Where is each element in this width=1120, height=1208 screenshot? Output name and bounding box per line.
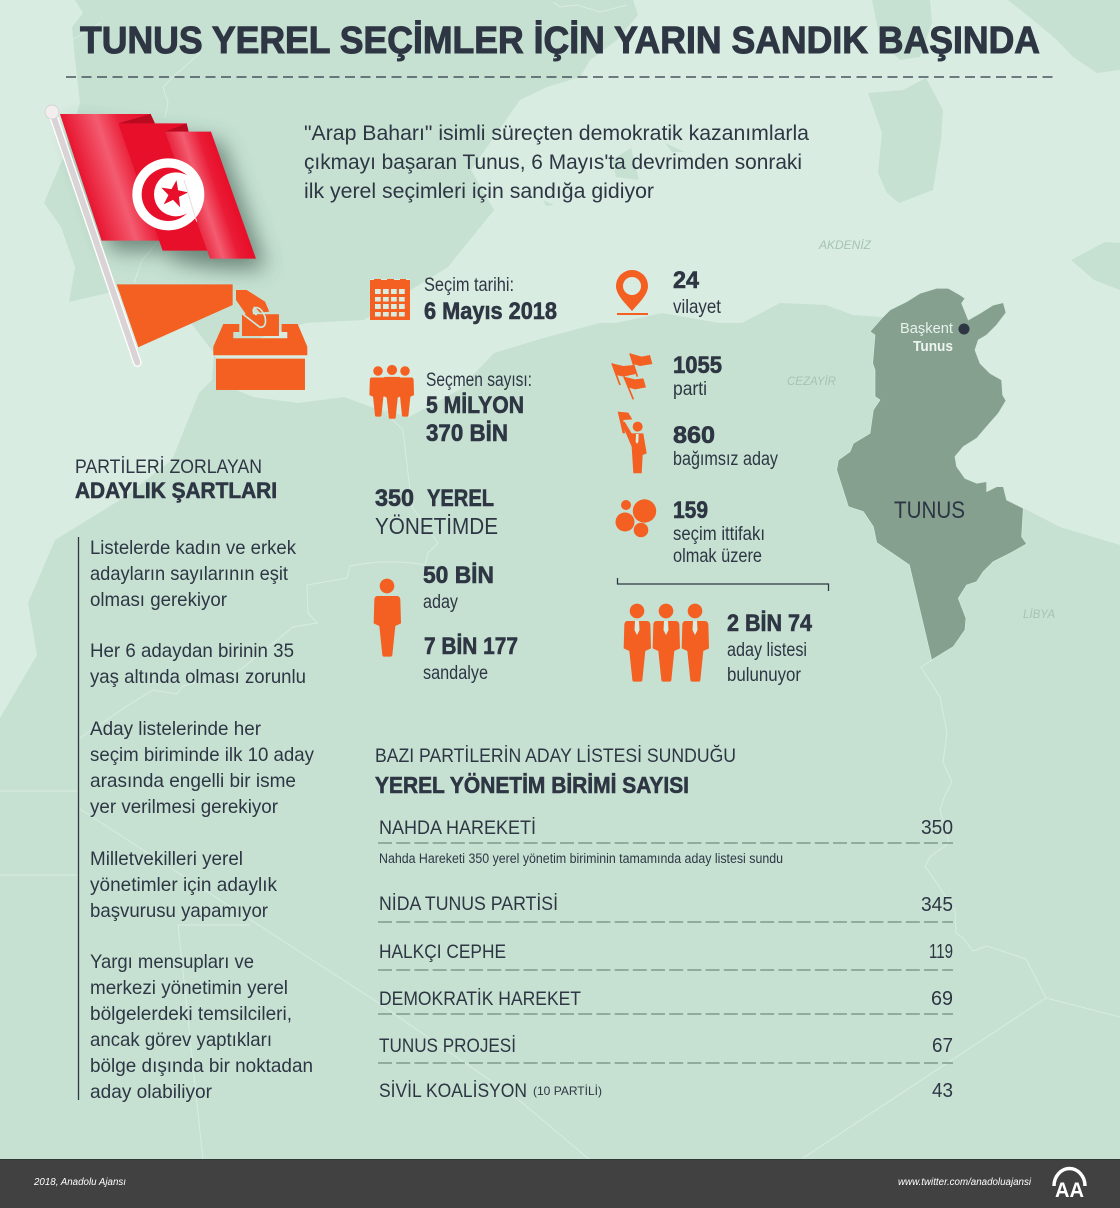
list: candidacy conditions: merkezi yönetimin yerel [90, 977, 288, 999]
list: candidacy conditions: Aday listelerinde her [90, 718, 261, 740]
list: candidacy conditions: Listelerde kadın ve erkek [90, 537, 296, 559]
icon: calendar [370, 279, 410, 320]
stat: independents [673, 422, 778, 470]
stat: candidates and seats: sandalye [423, 663, 488, 684]
stat: election date [424, 275, 557, 325]
table: parties and local unit counts [378, 816, 953, 1102]
stat: provinces: vilayet [673, 297, 722, 318]
list: candidacy conditions: adayların sayılarının eşit [90, 563, 289, 585]
stat: election date: 6 Mayıs 2018 [424, 298, 557, 325]
heading: candidacy conditions [75, 457, 277, 503]
stat: 350 local administrations: 350 [375, 485, 414, 512]
intro text: ilk yerel seçimleri için sandığa gidiyor [304, 180, 654, 203]
list: candidacy conditions: arasında engelli bir isme [90, 770, 296, 792]
stat: voters: Seçmen sayısı: [426, 370, 532, 391]
map: Tunisia: Tunus [913, 339, 953, 355]
icon: Anadolu Agency logo [1054, 1168, 1085, 1202]
icon: alliance circles [616, 499, 656, 537]
table: parties and local unit counts: 67 [932, 1035, 953, 1057]
stat: candidate lists: bulunuyor [727, 665, 802, 686]
stat: provinces [673, 267, 722, 318]
stat: independents: 860 [673, 422, 715, 449]
list: candidacy conditions: Her 6 adaydan birinin 35 [90, 640, 294, 662]
icon: candidate [374, 579, 401, 657]
stat: voters [426, 370, 532, 447]
map labels: CEZAYİR [787, 374, 836, 388]
intro text: "Arap Baharı" isimli süreçten demokratik kazanımlarla [304, 122, 809, 145]
intro text: çıkmayı başaran Tunus, 6 Mayıs'ta devrimden sonraki [304, 151, 802, 174]
heading: party table [375, 745, 736, 798]
table: parties and local unit counts: 350 [921, 817, 953, 839]
stat: alliances: olmak üzere [673, 546, 762, 567]
heading: party table: YEREL YÖNETİM BİRİMİ SAYISI [375, 772, 689, 798]
stat: election date: Seçim tarihi: [424, 275, 514, 296]
stat: candidate lists [727, 610, 813, 686]
table: parties and local unit counts: NAHDA HAREKETİ [379, 816, 536, 839]
stat: parties: 1055 [673, 352, 722, 379]
icon: voters [369, 365, 414, 419]
list: candidacy conditions: yaş altında olması zorunlu [90, 666, 306, 688]
heading: candidacy conditions: ADAYLIK ŞARTLARI [75, 478, 277, 503]
illustration: Tunisian flag and ballot box [45, 105, 307, 390]
stat: candidates and seats: 50 BİN [423, 562, 494, 589]
title: TUNUS YEREL SEÇİMLER İÇİN YARIN SANDIK BAŞINDA [80, 20, 1040, 62]
stat: 350 local administrations [375, 485, 498, 539]
table: parties and local unit counts: (10 PARTİLİ) [533, 1084, 602, 1098]
icon: three candidates [624, 604, 709, 682]
icon: independent candidate [618, 412, 647, 473]
footer bar: www.twitter.com/anadoluajansi [898, 1177, 1032, 1188]
table: parties and local unit counts: TUNUS PROJESİ [379, 1034, 516, 1057]
map: Tunisia: TUNUS [894, 497, 965, 524]
list: candidacy conditions: yer verilmesi gerekiyor [90, 796, 278, 818]
stat: candidates and seats: aday [423, 592, 458, 613]
list: candidacy conditions: olması gerekiyor [90, 589, 227, 611]
stat: candidates and seats: 7 BİN 177 [424, 633, 518, 660]
heading: party table: BAZI PARTİLERİN ADAY LİSTESİ SUNDUĞU [375, 745, 736, 767]
stat: alliances: 159 [673, 497, 708, 524]
table: parties and local unit counts: NİDA TUNUS PARTİSİ [379, 892, 558, 915]
table: parties and local unit counts: HALKÇI CEPHE [379, 941, 506, 963]
stat: voters: 5 MİLYON [426, 392, 524, 419]
stat: parties [673, 352, 722, 400]
icon: location pin [616, 270, 648, 315]
list: candidacy conditions: başvurusu yapamıyor [90, 900, 268, 922]
table: parties and local unit counts: 119 [929, 941, 953, 963]
stat: 350 local administrations: YÖNETİMDE [375, 513, 498, 539]
footer bar: 2018, Anadolu Ajansı [33, 1177, 126, 1188]
map labels [787, 238, 1055, 621]
list: candidacy conditions: bölge dışında bir noktadan [90, 1055, 313, 1077]
list: candidacy conditions: ancak görev yaptıkları [90, 1029, 272, 1051]
table: parties and local unit counts: SİVİL KOALİSYON [379, 1079, 527, 1102]
intro text [304, 122, 809, 203]
icon: Anadolu Agency logo: AA [1055, 1179, 1084, 1202]
icon: party flags [612, 353, 652, 399]
stat: candidates and seats [423, 562, 518, 684]
stat: candidate lists: 2 BİN 74 [727, 610, 813, 637]
map: Tunisia: Başkent [900, 321, 953, 337]
list: candidacy conditions: bölgelerdeki temsilcileri, [90, 1003, 292, 1025]
list: candidacy conditions: Yargı mensupları ve [90, 951, 254, 973]
footer bar [0, 1159, 1120, 1208]
stat: candidate lists: aday listesi [727, 640, 807, 661]
table: parties and local unit counts: Nahda Hareketi 350 yerel yönetim biriminin tamamında aday listesi sundu [379, 851, 783, 866]
list: candidacy conditions: yönetimler için adaylık [90, 874, 277, 896]
list: candidacy conditions: seçim biriminde ilk 10 aday [90, 744, 314, 766]
heading: candidacy conditions: PARTİLERİ ZORLAYAN [75, 457, 262, 478]
map labels: AKDENİZ [818, 238, 872, 252]
map labels: LİBYA [1023, 607, 1055, 621]
stat: 350 local administrations: YEREL [427, 485, 494, 512]
stat: alliances [673, 497, 765, 567]
list: candidacy conditions [90, 537, 314, 1103]
stat: parties: parti [673, 379, 707, 400]
table: parties and local unit counts: DEMOKRATİK HAREKET [379, 987, 581, 1010]
list: candidacy conditions: Milletvekilleri yerel [90, 848, 243, 870]
table: parties and local unit counts: 345 [921, 894, 953, 916]
stat: voters: 370 BİN [426, 420, 508, 447]
table: parties and local unit counts: 69 [931, 988, 953, 1010]
list: candidacy conditions: aday olabiliyor [90, 1081, 212, 1103]
table: parties and local unit counts: 43 [932, 1080, 953, 1102]
stat: independents: bağımsız aday [673, 449, 778, 470]
stat: provinces: 24 [673, 267, 700, 294]
map: Tunisia [837, 288, 1027, 660]
stat: alliances: seçim ittifakı [673, 524, 765, 545]
